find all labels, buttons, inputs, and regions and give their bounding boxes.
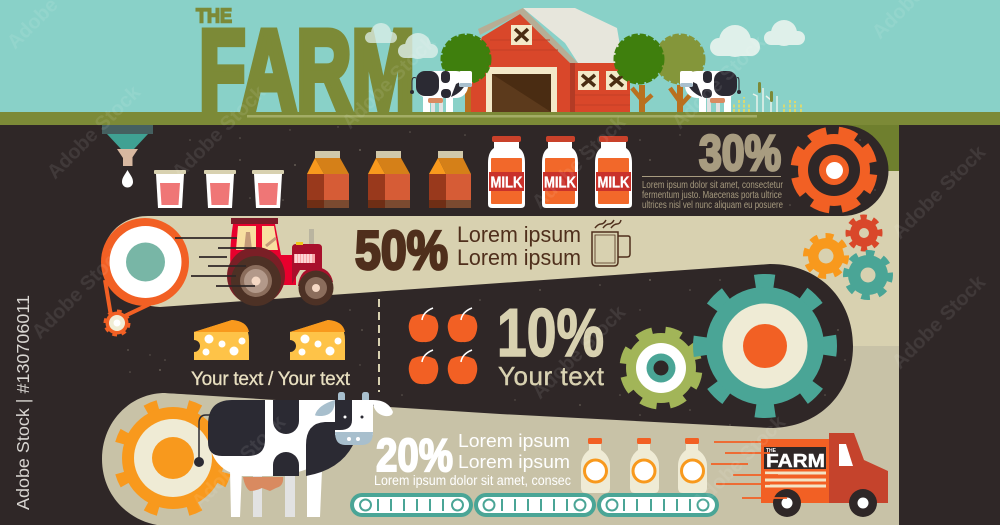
band 4 lower beige background [102, 346, 899, 525]
20% stat block: Lorem ipsum dolor sit amet, consec [374, 473, 571, 488]
title: The Farm: THE [196, 6, 232, 28]
milk bottles: MILK [544, 174, 577, 192]
delivery truck: FARM [766, 451, 825, 471]
faint watermarks: Adobe Stock [188, 411, 291, 514]
clouds [365, 20, 805, 59]
cheese caption: Your text / Your text [191, 369, 351, 390]
small bottles on conveyor [581, 438, 707, 493]
dashed divider [378, 299, 380, 392]
speckle texture [127, 126, 876, 426]
10% stat block: Your text [498, 361, 605, 391]
30% stat block [642, 125, 783, 211]
belt pulley with small gear [101, 218, 189, 335]
faint watermarks: Adobe Stock [688, 411, 791, 514]
band 2 cream background [102, 171, 899, 350]
cups row [154, 170, 284, 208]
10% stat block [497, 295, 605, 391]
sky [0, 0, 1000, 113]
faint watermarks: Adobe Stock [528, 111, 631, 214]
milk bottles: MILK [490, 174, 523, 192]
30% stat block: 30% [699, 125, 781, 181]
stock watermark id: Adobe Stock | #130706011 [13, 295, 33, 510]
gear: large orange behind cow [119, 404, 227, 512]
band 3 dark middle [100, 264, 853, 428]
tractor [227, 218, 334, 306]
faint watermarks: Adobe Stock [168, 81, 271, 184]
50% stat block: 50% [355, 219, 448, 281]
icon: coffee mug [592, 220, 630, 266]
milk bottles: MILK [598, 174, 630, 192]
icon: funnel with drop [102, 125, 153, 188]
gear: large teal [701, 282, 829, 410]
crops [734, 82, 801, 112]
20% stat block: Lorem ipsum [458, 451, 570, 472]
gear: green [626, 333, 696, 403]
20% stat block: 20% [376, 429, 453, 481]
apples [409, 308, 477, 384]
gear: orange top [796, 132, 872, 208]
faint watermarks: Adobe Stock [888, 271, 991, 374]
truck speed lines [711, 442, 787, 498]
10% stat block: 10% [497, 295, 604, 371]
grass strip [0, 112, 1000, 125]
band 1 dark top [0, 125, 889, 216]
30% stat block: fermentum justo. Maecenas porta ultrice [642, 189, 782, 201]
cluster of small gears [806, 217, 890, 297]
milk bottles [488, 136, 632, 208]
barn [468, 8, 630, 112]
conveyor belts [350, 493, 719, 517]
50% stat block: Lorem ipsum [457, 245, 581, 270]
title: The Farm [196, 6, 415, 133]
tractor speed lines [175, 238, 256, 286]
title: The Farm: FARM [199, 7, 415, 133]
large cow [194, 392, 393, 517]
milk cartons [307, 151, 471, 208]
small cow right [680, 71, 741, 112]
olive corner behind top band [800, 119, 899, 171]
faint watermarks: Adobe Stock [338, 31, 441, 134]
20% stat block [374, 429, 571, 488]
30% stat block: ultrices nisl vel nunc aliquam eu posuere [642, 199, 783, 211]
faint watermarks: Adobe Stock [43, 81, 146, 184]
delivery truck: THE [766, 448, 777, 454]
50% stat block [355, 219, 581, 281]
50% stat block: Lorem ipsum [457, 222, 581, 247]
faint watermarks: Adobe Stock [528, 301, 631, 404]
small cow left [410, 71, 472, 112]
30% stat block: Lorem ipsum dolor sit amet, consectetur [642, 179, 783, 191]
faint watermarks: Adobe Stock [888, 141, 991, 244]
faint watermarks: Adobe Stock [668, 31, 771, 134]
faint watermarks: Adobe Stock [28, 241, 131, 344]
cheese wedges [194, 320, 345, 360]
trees [442, 35, 704, 112]
20% stat block: Lorem ipsum [458, 430, 570, 451]
delivery truck [761, 433, 888, 517]
